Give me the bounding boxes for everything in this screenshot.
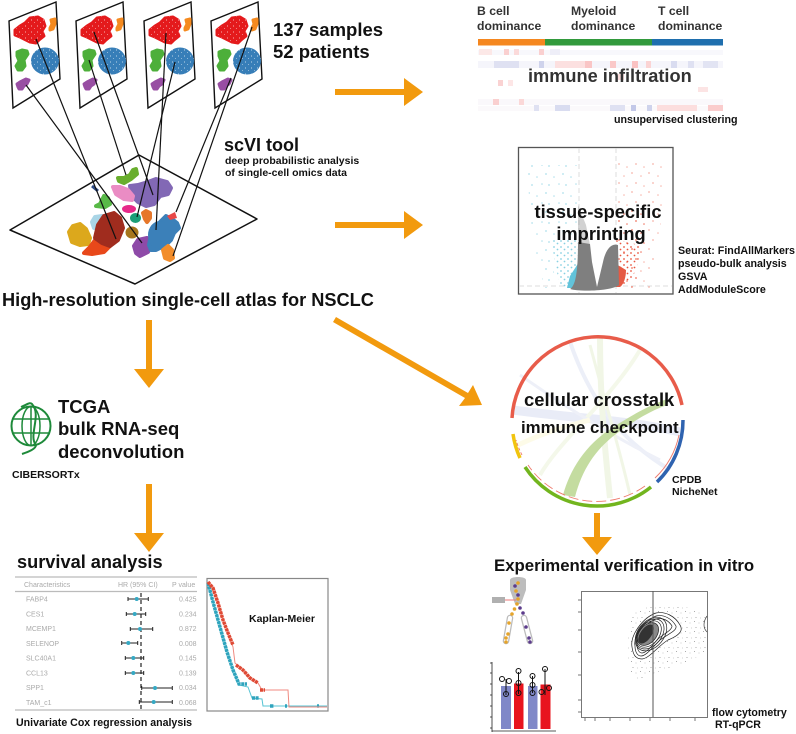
text: scVI tool: scVI tool — [224, 135, 299, 155]
forest labels: 0.425 — [179, 596, 197, 604]
forest header: HR (95% CI) — [118, 582, 158, 589]
text: sample counts: 137 samples — [273, 19, 383, 40]
arrow: crosstalk to verification — [582, 513, 612, 555]
text: verification methods: flow cytometry — [712, 707, 787, 719]
volcano right points — [616, 158, 665, 288]
forest labels: SLC40A1 — [26, 656, 56, 662]
heading: experimental verification: Experimental verification in vitro — [494, 556, 754, 575]
forest header: Characteristics — [24, 582, 71, 589]
flow scatter — [627, 605, 707, 680]
arrow: atlas to infiltration — [335, 78, 423, 106]
heatmap caption: unsupervised clustering — [614, 114, 738, 126]
forest labels: CES1 — [26, 612, 44, 618]
text: TCGA deconvolution: TCGA — [58, 396, 110, 417]
text: differential analysis methods: GSVA — [678, 271, 708, 283]
forest labels: 0.234 — [179, 612, 197, 618]
sample plot 1 — [9, 2, 60, 108]
KM red curve — [208, 582, 327, 707]
chord inner arcs — [516, 435, 679, 501]
forest labels: 0.139 — [179, 670, 197, 678]
panel: integrated atlas UMAP — [10, 155, 257, 284]
heatmap column labels: dominance — [477, 19, 542, 33]
volcano title: imprinting — [556, 223, 646, 244]
volcano left points — [528, 165, 579, 288]
chord labels — [521, 389, 679, 437]
heatmap column labels: B cell — [477, 4, 510, 18]
panel: volcano plot — [518, 148, 673, 294]
panel: immune infiltration heatmap — [477, 4, 738, 126]
text: CIBERSORTx: CIBERSORTx — [12, 469, 80, 481]
panel: chord diagram — [512, 337, 683, 506]
chord main ribbon — [563, 399, 667, 497]
text: TCGA deconvolution — [58, 396, 184, 462]
sample plot 3 — [144, 2, 195, 108]
chord ribbons — [513, 338, 680, 498]
flow axis ticks — [578, 600, 695, 721]
forest labels: MCEMP1 — [26, 626, 56, 633]
sample plot 4 — [211, 2, 262, 108]
heatmap group bar — [478, 39, 723, 46]
panel: four sample UMAP plots — [9, 2, 262, 108]
chart: flow cytometry contour plot — [578, 591, 708, 721]
heatmap column labels: T cell — [658, 4, 689, 18]
text: TCGA deconvolution: deconvolution — [58, 441, 184, 462]
connector lines from samples to atlas — [26, 27, 252, 256]
forest labels: TAM_c1 — [26, 700, 52, 707]
forest estimates — [126, 597, 157, 704]
forest labels: SPP1 — [26, 685, 44, 692]
panel: forest plot — [15, 577, 197, 710]
text: differential analysis methods — [678, 245, 795, 296]
forest labels — [26, 596, 197, 707]
forest header — [24, 582, 195, 589]
text: verification methods: RT-qPCR — [715, 719, 761, 731]
forest labels: 0.034 — [179, 685, 197, 692]
text: sample counts — [273, 19, 383, 62]
text: crosstalk tools — [672, 474, 718, 498]
text: Cox caption: Univariate Cox regression analysis — [16, 717, 192, 729]
arrow: atlas to crosstalk — [333, 317, 482, 406]
flow density core — [635, 622, 657, 646]
chord labels: immune checkpoint — [521, 418, 679, 437]
chord labels: cellular crosstalk — [524, 389, 675, 410]
heatmap column labels — [477, 4, 723, 33]
volcano title: tissue-specific — [534, 201, 662, 222]
forest labels: 0.068 — [179, 700, 197, 707]
text: differential analysis methods: pseudo-bulk analysis — [678, 258, 787, 270]
icon: cell sorter — [492, 577, 532, 644]
forest labels: 0.872 — [179, 626, 197, 633]
sample plot 2 — [76, 2, 127, 108]
forest header: P value — [172, 582, 195, 589]
icon: TCGA globe — [12, 403, 50, 454]
flow contours — [629, 611, 681, 659]
heatmap cells — [478, 49, 723, 111]
heatmap column labels: dominance — [571, 19, 636, 33]
text: scVI tool — [224, 135, 359, 179]
forest labels: 0.145 — [179, 656, 197, 662]
arrow: atlas to imprinting — [335, 211, 423, 239]
forest labels: CCL13 — [26, 670, 48, 678]
volcano non-significant points — [570, 205, 619, 291]
KM blue curve — [208, 583, 327, 706]
heatmap column labels: dominance — [658, 19, 723, 33]
text: crosstalk tools: NicheNet — [672, 486, 718, 498]
text: scVI tool: of single-cell omics data — [225, 167, 347, 179]
text: differential analysis methods: AddModuleScore — [678, 284, 766, 296]
text: TCGA deconvolution: bulk RNA-seq — [58, 418, 179, 439]
arrow: TCGA to survival — [134, 484, 164, 552]
volcano title — [534, 201, 662, 244]
forest labels: SELENOP — [26, 641, 59, 648]
forest reference line — [140, 593, 142, 710]
chord outer arcs — [512, 337, 683, 506]
text: crosstalk tools: CPDB — [672, 474, 702, 486]
forest labels: 0.008 — [179, 641, 197, 648]
text: scVI tool: deep probabilistic analysis — [225, 155, 359, 167]
heatmap column labels: Myeloid — [571, 4, 616, 18]
arrow: atlas to TCGA — [134, 320, 164, 388]
forest labels: FABP4 — [26, 596, 48, 604]
text: differential analysis methods: Seurat: FindAllMarkers — [678, 245, 795, 257]
text: verification methods — [712, 707, 787, 731]
KM label: Kaplan-Meier — [249, 613, 315, 625]
text: sample counts: 52 patients — [273, 41, 370, 62]
heatmap title: immune infiltration — [528, 66, 692, 86]
forest intervals — [122, 597, 172, 704]
heading: survival analysis: survival analysis — [17, 552, 163, 572]
panel: Kaplan-Meier plot — [207, 578, 328, 711]
chart: qPCR bar chart — [490, 662, 556, 732]
heading: atlas title: High-resolution single-cell atlas for NSCLC — [2, 290, 374, 310]
